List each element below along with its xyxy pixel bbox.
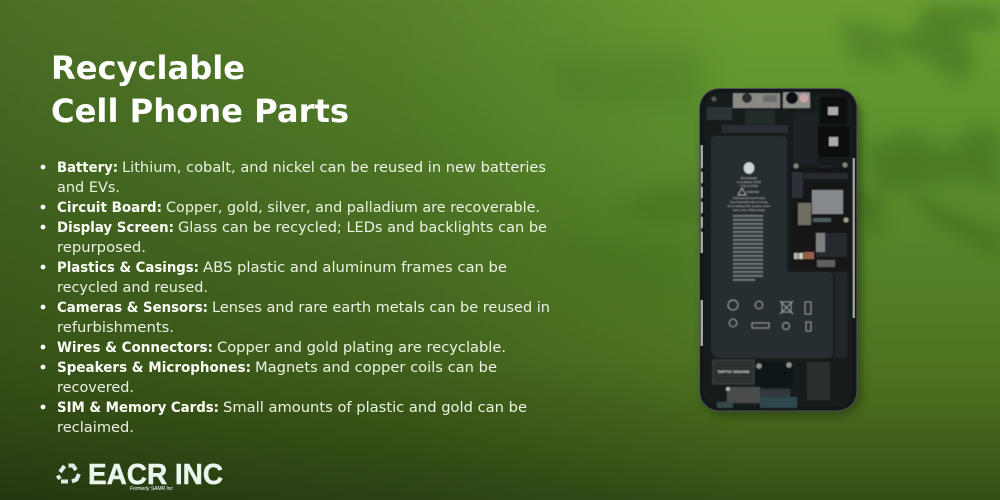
list item: cameras and sensors: refurbishments.	[57, 320, 174, 336]
list item: SIM and memory cards: SIM & Memory Cards:	[57, 400, 219, 416]
list item: speakers and microphones: Magnets and copper coils can be	[255, 360, 497, 376]
battery label text: Only. Potential for fire or burning.	[730, 200, 768, 204]
list item: plastics and casings	[41, 260, 507, 296]
list item: SIM and memory cards: reclaimed.	[57, 420, 134, 436]
list item: cameras and sensors: Lenses and rare earth metals can be reused in	[212, 300, 550, 316]
title: Cell Phone Parts	[51, 92, 349, 130]
phone body	[699, 88, 858, 412]
battery label text: 3.79V 11.67Wh	[740, 184, 758, 188]
battery label text: Rechargeable	[741, 176, 758, 180]
tagline: Formerly SAMR Inc	[130, 486, 173, 492]
battery label text: Authorized Service Provider	[733, 196, 765, 200]
list item: SIM and memory cards: Small amounts of plastic and gold can be	[223, 400, 527, 416]
upper right shields	[793, 97, 850, 173]
phone with back removed	[699, 88, 862, 416]
list item: cameras and sensors: Cameras & Sensors:	[57, 300, 208, 316]
list item: battery: Battery:	[57, 160, 118, 176]
list item: speakers and microphones: Speakers & Microphones:	[57, 360, 251, 376]
list item: speakers and microphones	[41, 360, 497, 396]
battery label text: heat, or burn. Read manual.	[733, 208, 765, 212]
battery	[711, 136, 833, 358]
logo: EACR INC	[58, 459, 223, 492]
title: Recyclable	[51, 49, 245, 87]
battery label text: Do not disassemble, puncture, crush,	[728, 204, 771, 208]
battery certification marks	[728, 300, 811, 331]
phone shadow	[702, 94, 862, 416]
list item: display screen: repurposed.	[57, 240, 146, 256]
list item: cameras and sensors	[41, 300, 550, 336]
list item: circuit board: Copper, gold, silver, and palladium are recoverable.	[166, 200, 540, 216]
internals	[701, 92, 852, 408]
list item: battery	[41, 160, 546, 196]
taptic engine: TAPTIC ENGINE	[718, 370, 750, 374]
icon: recycling arrows	[58, 466, 79, 482]
list item: plastics and casings: ABS plastic and aluminum frames can be	[203, 260, 507, 276]
list item: SIM and memory cards	[41, 400, 527, 436]
list item: display screen	[41, 220, 547, 256]
list item: plastics and casings: recycled and reused.	[57, 280, 208, 296]
battery fine print block	[733, 215, 763, 281]
left rail screws	[701, 168, 705, 232]
list item: battery: Lithium, cobalt, and nickel can be reused in new batteries	[122, 160, 546, 176]
list item: display screen: Glass can be recycled; LEDs and backlights can be	[178, 220, 547, 236]
list item: battery: and EVs.	[57, 180, 120, 196]
battery label text: Li-ion Battery, A2219	[737, 180, 761, 184]
bullet list: recyclable parts	[41, 160, 550, 436]
logic board	[791, 162, 849, 271]
battery logo	[744, 162, 754, 174]
battery label text: WARNING	[747, 190, 759, 194]
right rail	[835, 272, 847, 358]
top camera module	[707, 92, 810, 133]
battery label text	[728, 176, 771, 212]
list item: wires and connectors: Wires & Connectors:	[57, 340, 213, 356]
list item: display screen: Display Screen:	[57, 220, 174, 236]
taptic engine	[713, 360, 754, 384]
wordmark: EACR INC	[88, 459, 223, 491]
list item: wires and connectors: Copper and gold plating are recyclable.	[217, 340, 506, 356]
list item: speakers and microphones: recovered.	[57, 380, 134, 396]
list item: plastics and casings: Plastics & Casings:	[57, 260, 199, 276]
list item: circuit board: Circuit Board:	[57, 200, 162, 216]
title	[51, 49, 349, 130]
bottom components	[717, 362, 847, 408]
list item: wires and connectors	[41, 340, 506, 356]
